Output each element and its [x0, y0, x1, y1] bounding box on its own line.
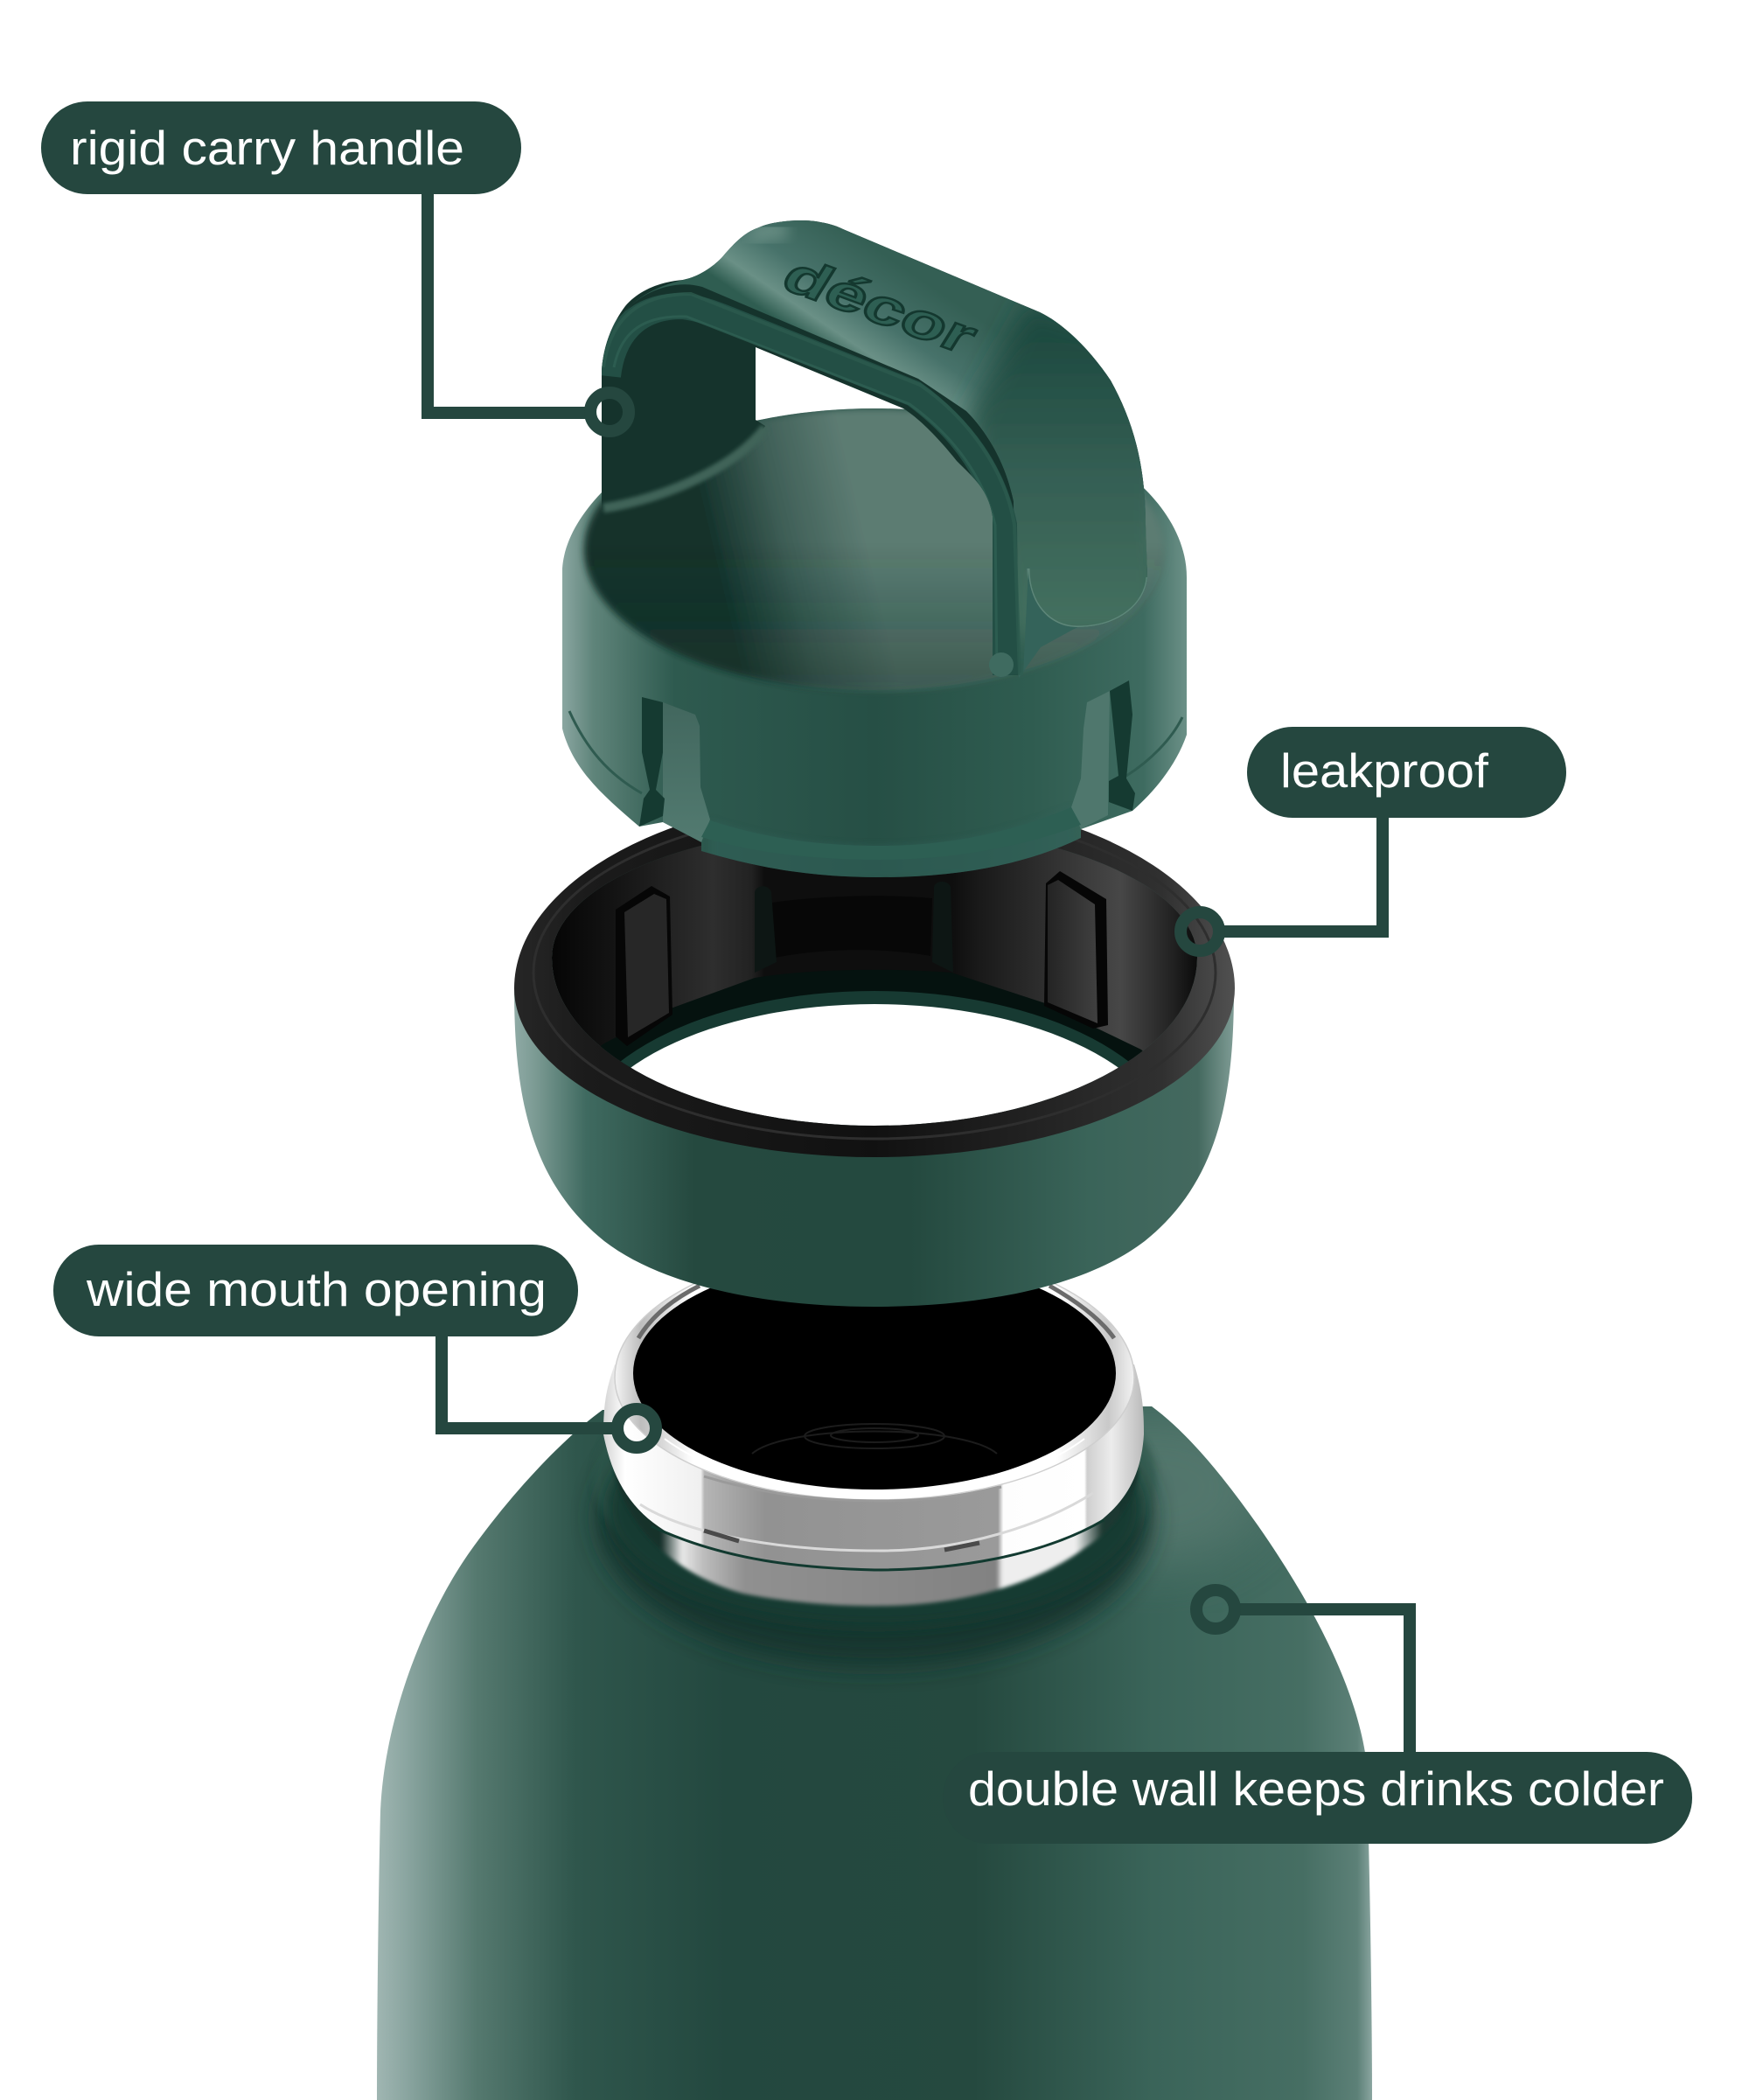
left slit [639, 697, 665, 827]
right slit [1109, 680, 1135, 811]
hole showing through ring [631, 1004, 1118, 1126]
handle top surface [612, 220, 1147, 675]
callout: wide mouth opening [53, 1245, 656, 1448]
carry handle [602, 220, 1163, 678]
handle front rim [603, 294, 1020, 675]
callout: wide mouth opening: wide mouth opening [86, 1262, 547, 1316]
locking ring [514, 794, 1235, 1315]
ring interior walls [552, 846, 1197, 1126]
bottle body [377, 1347, 1372, 2100]
front lip [701, 808, 1081, 848]
right clip [1044, 871, 1108, 1029]
skirt creases [569, 711, 642, 793]
steel bottle neck and mouth [603, 1247, 1144, 1606]
callout: double wall keeps drinks colder [943, 1590, 1692, 1844]
dome top surface [584, 408, 1165, 690]
right foot below tongue [1014, 501, 1077, 678]
left light post [663, 702, 710, 842]
bottle cap [562, 220, 1187, 883]
callout: double wall keeps drinks colder: double wall keeps drinks colder [968, 1762, 1664, 1816]
left handle foot ridge [603, 428, 765, 508]
right light post [1071, 691, 1110, 829]
callout: rigid carry handle: rigid carry handle [70, 121, 464, 175]
left clip [616, 886, 672, 1046]
embossed décor logo: décor [772, 248, 987, 364]
center slot [772, 896, 932, 958]
right leg shading [966, 302, 1163, 638]
black gasket rim [514, 794, 1235, 1157]
callout: leakproof: leakproof [1280, 743, 1489, 798]
black interior of mouth [633, 1257, 1116, 1490]
cap outer shell [562, 408, 1187, 877]
handle right foot nub [989, 652, 1014, 677]
callout: leakproof [1181, 727, 1566, 951]
callout: rigid carry handle [41, 101, 629, 431]
